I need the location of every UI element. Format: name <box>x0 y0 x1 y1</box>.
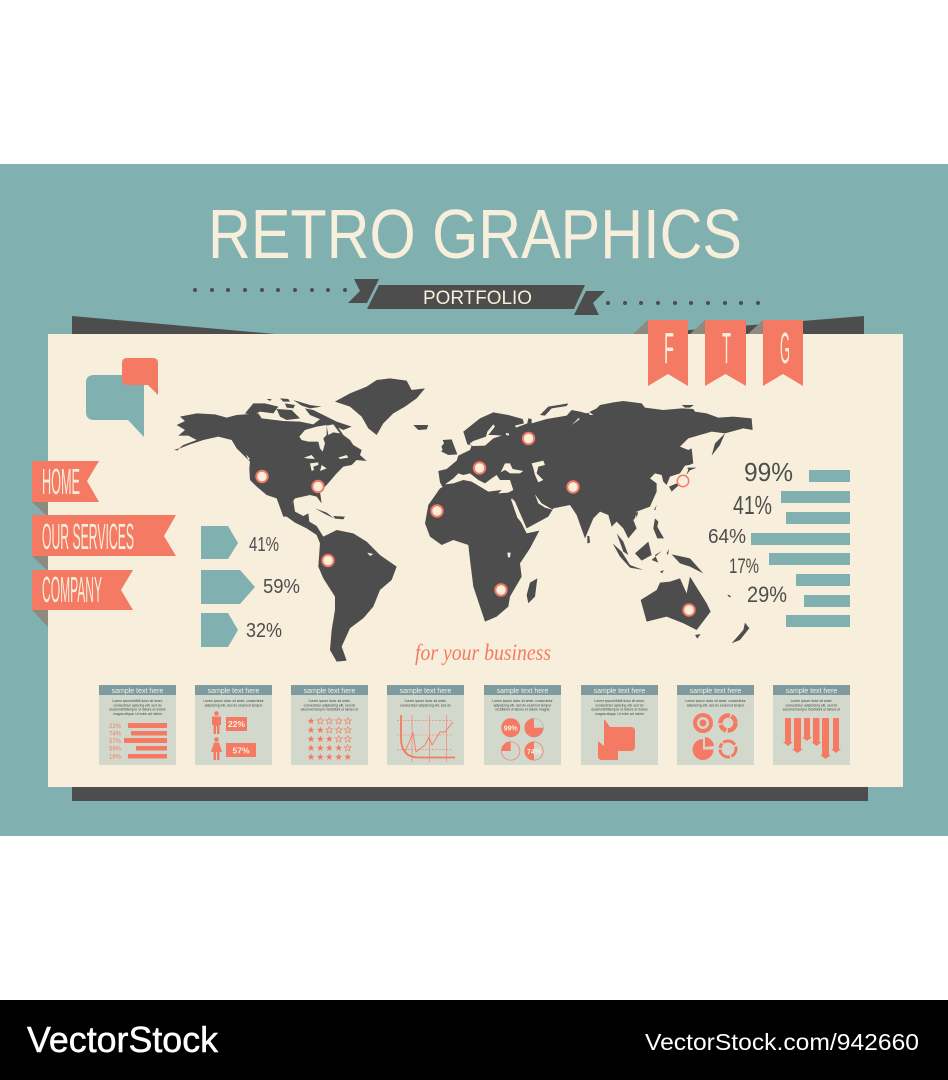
card 1: bars: 18% <box>109 754 122 760</box>
card 5: pie charts: incididunt ut labore et dolore magna <box>496 708 550 712</box>
left arrow stats: 32% <box>246 620 282 642</box>
africa and oceania <box>425 480 749 643</box>
card 2: people: adipiscing elit, sed do eiusmod tempor <box>205 703 263 707</box>
map location markers <box>256 433 695 616</box>
navigation ribbons: COMPANY <box>42 569 102 610</box>
card 8: down arrows: eiusmod tempor incididunt ut labore et <box>783 708 840 712</box>
card 3: star ratings: consectetur adipisicing elit, sed do <box>304 703 355 707</box>
card 8: down arrows <box>773 685 850 765</box>
right bar chart: 99% <box>744 457 793 487</box>
card 4: line chart: sample text here <box>400 688 451 695</box>
card 1: bars: 74% <box>109 732 122 738</box>
card 1: bars: sample text here <box>112 688 163 695</box>
navigation ribbons: HOME <box>42 461 80 502</box>
black watermark footer: VectorStock.com/942660 <box>645 1029 919 1055</box>
social ribbons <box>633 320 803 386</box>
world map <box>174 378 753 662</box>
card 1: bars <box>99 685 176 765</box>
card 1: bars: 57% <box>109 739 122 745</box>
eurasia <box>437 401 753 538</box>
card 4: line chart: Lorem ipsum dolor sit amet, <box>405 699 446 703</box>
card 1: bars: 22% <box>109 724 122 730</box>
card 5: pie charts: Lorem ipsum dolor sit amet, consectetur <box>492 699 554 703</box>
card 5: pie charts: 74% <box>527 749 542 756</box>
card 6: speech shape: Lorem ipsumhfdfdf dolor sit amet, <box>594 699 645 703</box>
card 8: down arrows: Lorem ipsum dolor sit amet, <box>791 699 832 703</box>
card 5: pie charts: adipiscing elit, sed do eiusmod tempor <box>494 703 552 707</box>
panel shadow strips <box>72 316 868 801</box>
card 3: star ratings: sample text here <box>304 688 355 695</box>
social ribbons: T <box>722 324 731 373</box>
card 6: speech shape: consectetur apiscing elit, sed do <box>595 703 644 707</box>
dotted line right <box>606 301 760 305</box>
card 6: speech shape: sample text here <box>594 688 645 695</box>
east asia islands <box>613 405 725 573</box>
social ribbons: G <box>780 324 790 373</box>
card 8: down arrows: consectetur adipisicing elit, sed do <box>786 703 837 707</box>
card 7: donut charts: adipiscing elit, sed do eiusmod tempor <box>687 703 745 707</box>
card 2: people: sample text here <box>208 688 259 695</box>
card 5: pie charts: 99% <box>504 726 518 732</box>
card 5: pie charts <box>484 685 561 765</box>
card 1: bars: 59% <box>109 746 122 752</box>
card 4: line chart: consectetur adipiscing elit, sed do <box>400 703 451 707</box>
card 1: bars: consectetur apiscing elit, sed do <box>113 703 162 707</box>
social ribbons: F <box>664 324 674 373</box>
card 7: donut charts <box>677 685 754 765</box>
left arrow stats: 59% <box>263 576 300 598</box>
portfolio banner: PORTFOLIO <box>423 288 532 309</box>
portfolio banner <box>348 279 605 315</box>
icon: speech bubbles <box>86 358 158 437</box>
card 6: speech shape: eiusmodhfdtempor ut labore et dolore <box>591 708 648 712</box>
navigation ribbons <box>32 461 176 627</box>
card 7: donut charts: sample text here <box>690 688 741 695</box>
left arrow stats: 41% <box>249 534 279 556</box>
black watermark footer <box>0 1000 948 1080</box>
right bar chart: 29% <box>747 582 787 607</box>
black watermark footer: VectorStock <box>27 1019 219 1060</box>
north america <box>174 398 367 517</box>
hudson bay and lakes <box>246 424 348 510</box>
card 3: star ratings: eiusmod tempor incididunt ut labore et <box>301 708 358 712</box>
card 2: people: Lorem ipsum dolor sit amet, consectetur <box>203 699 265 703</box>
right bar chart: 17% <box>729 555 759 578</box>
card 4: line chart <box>387 685 464 765</box>
left arrow stats <box>201 526 300 647</box>
card 7: donut charts: Lorem ipsum dolor sit amet, consectetur <box>685 699 747 703</box>
title: RETRO GRAPHICS <box>208 195 742 273</box>
central and south america, greenland <box>278 378 428 662</box>
right bar chart: 41% <box>733 490 772 520</box>
teal background band <box>0 164 948 836</box>
right bar chart: 64% <box>708 526 746 548</box>
text: OUR SERVICES <box>42 516 134 557</box>
card 2: people <box>195 685 272 765</box>
card 2: people: 22% <box>228 719 245 729</box>
card 8: down arrows: sample text here <box>786 688 837 695</box>
card 5: pie charts: sample text here <box>497 688 548 695</box>
card 6: speech shape <box>581 685 658 765</box>
card 2: people: 57% <box>232 746 250 756</box>
card 3: star ratings <box>291 685 368 765</box>
right bar chart <box>708 457 850 627</box>
main cream panel <box>48 334 903 787</box>
tagline: for your business <box>415 640 551 665</box>
card 1: bars: Lorem ipsumhfdfdf dolor sit amet, <box>112 699 163 703</box>
card 3: star ratings: Lorem ipsum dolor sit amet, <box>309 699 350 703</box>
dotted line left <box>193 288 347 292</box>
seas <box>437 410 593 525</box>
card 1: bars: magna aliqua. Ut enim ad minim <box>113 712 162 716</box>
card 6: speech shape: magna aliqua. Ut enim ad minim <box>595 712 644 716</box>
card 1: bars: eiusmodhfdtempor ut labore et dolore <box>109 708 166 712</box>
